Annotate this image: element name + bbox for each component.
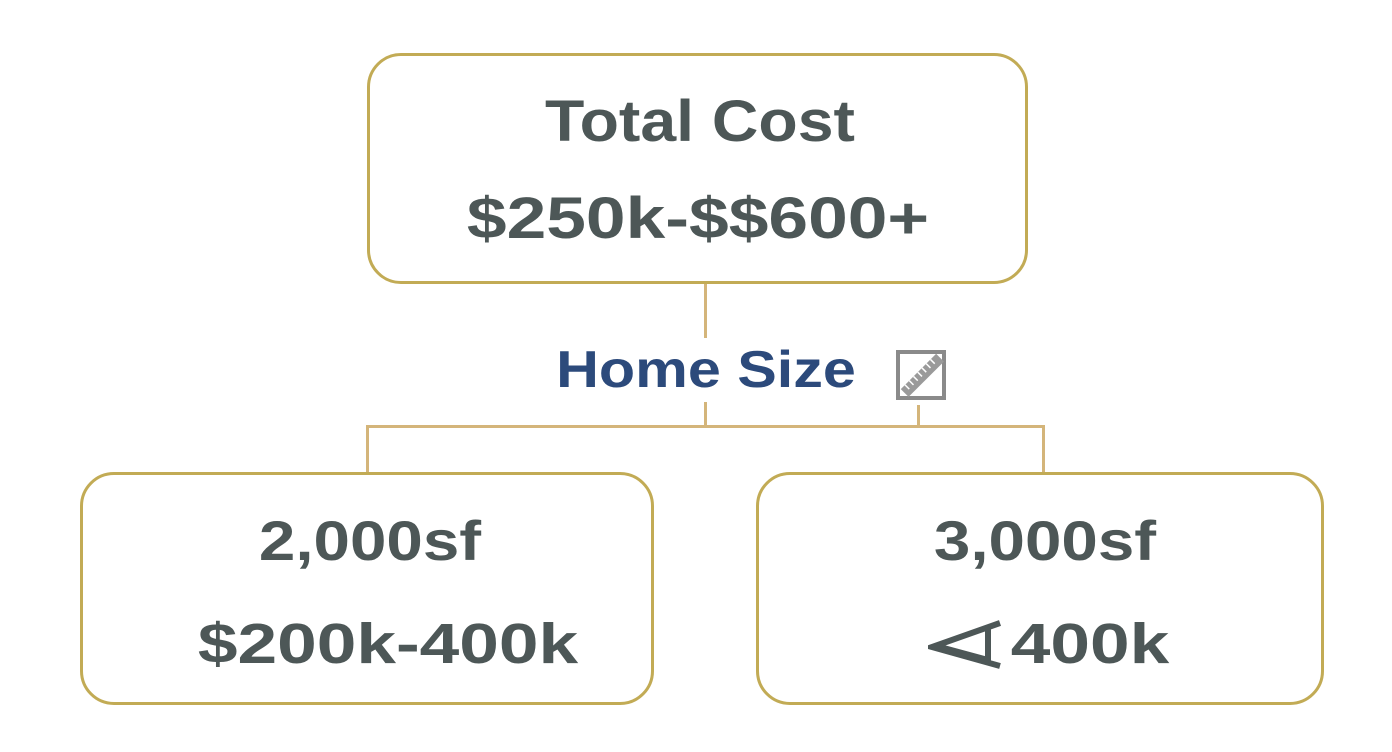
value: <400k — [928, 612, 1170, 676]
top box: total cost — [367, 53, 1028, 284]
box: 3,000sf — [756, 472, 1324, 705]
label: 3,000sf: 3,000sf — [934, 509, 1156, 572]
value: $200k-400k: $200k-400k — [198, 612, 578, 676]
value: <400k: 400k — [1011, 612, 1169, 676]
icon: ruler — [896, 350, 946, 400]
box: 2,000sf — [80, 472, 654, 705]
heading: Home Size: Home Size — [556, 341, 856, 399]
heading: Total Cost: Total Cost — [545, 89, 855, 154]
label: 2,000sf: 2,000sf — [259, 509, 481, 572]
value: total range: $250k-$$600+ — [467, 186, 929, 251]
